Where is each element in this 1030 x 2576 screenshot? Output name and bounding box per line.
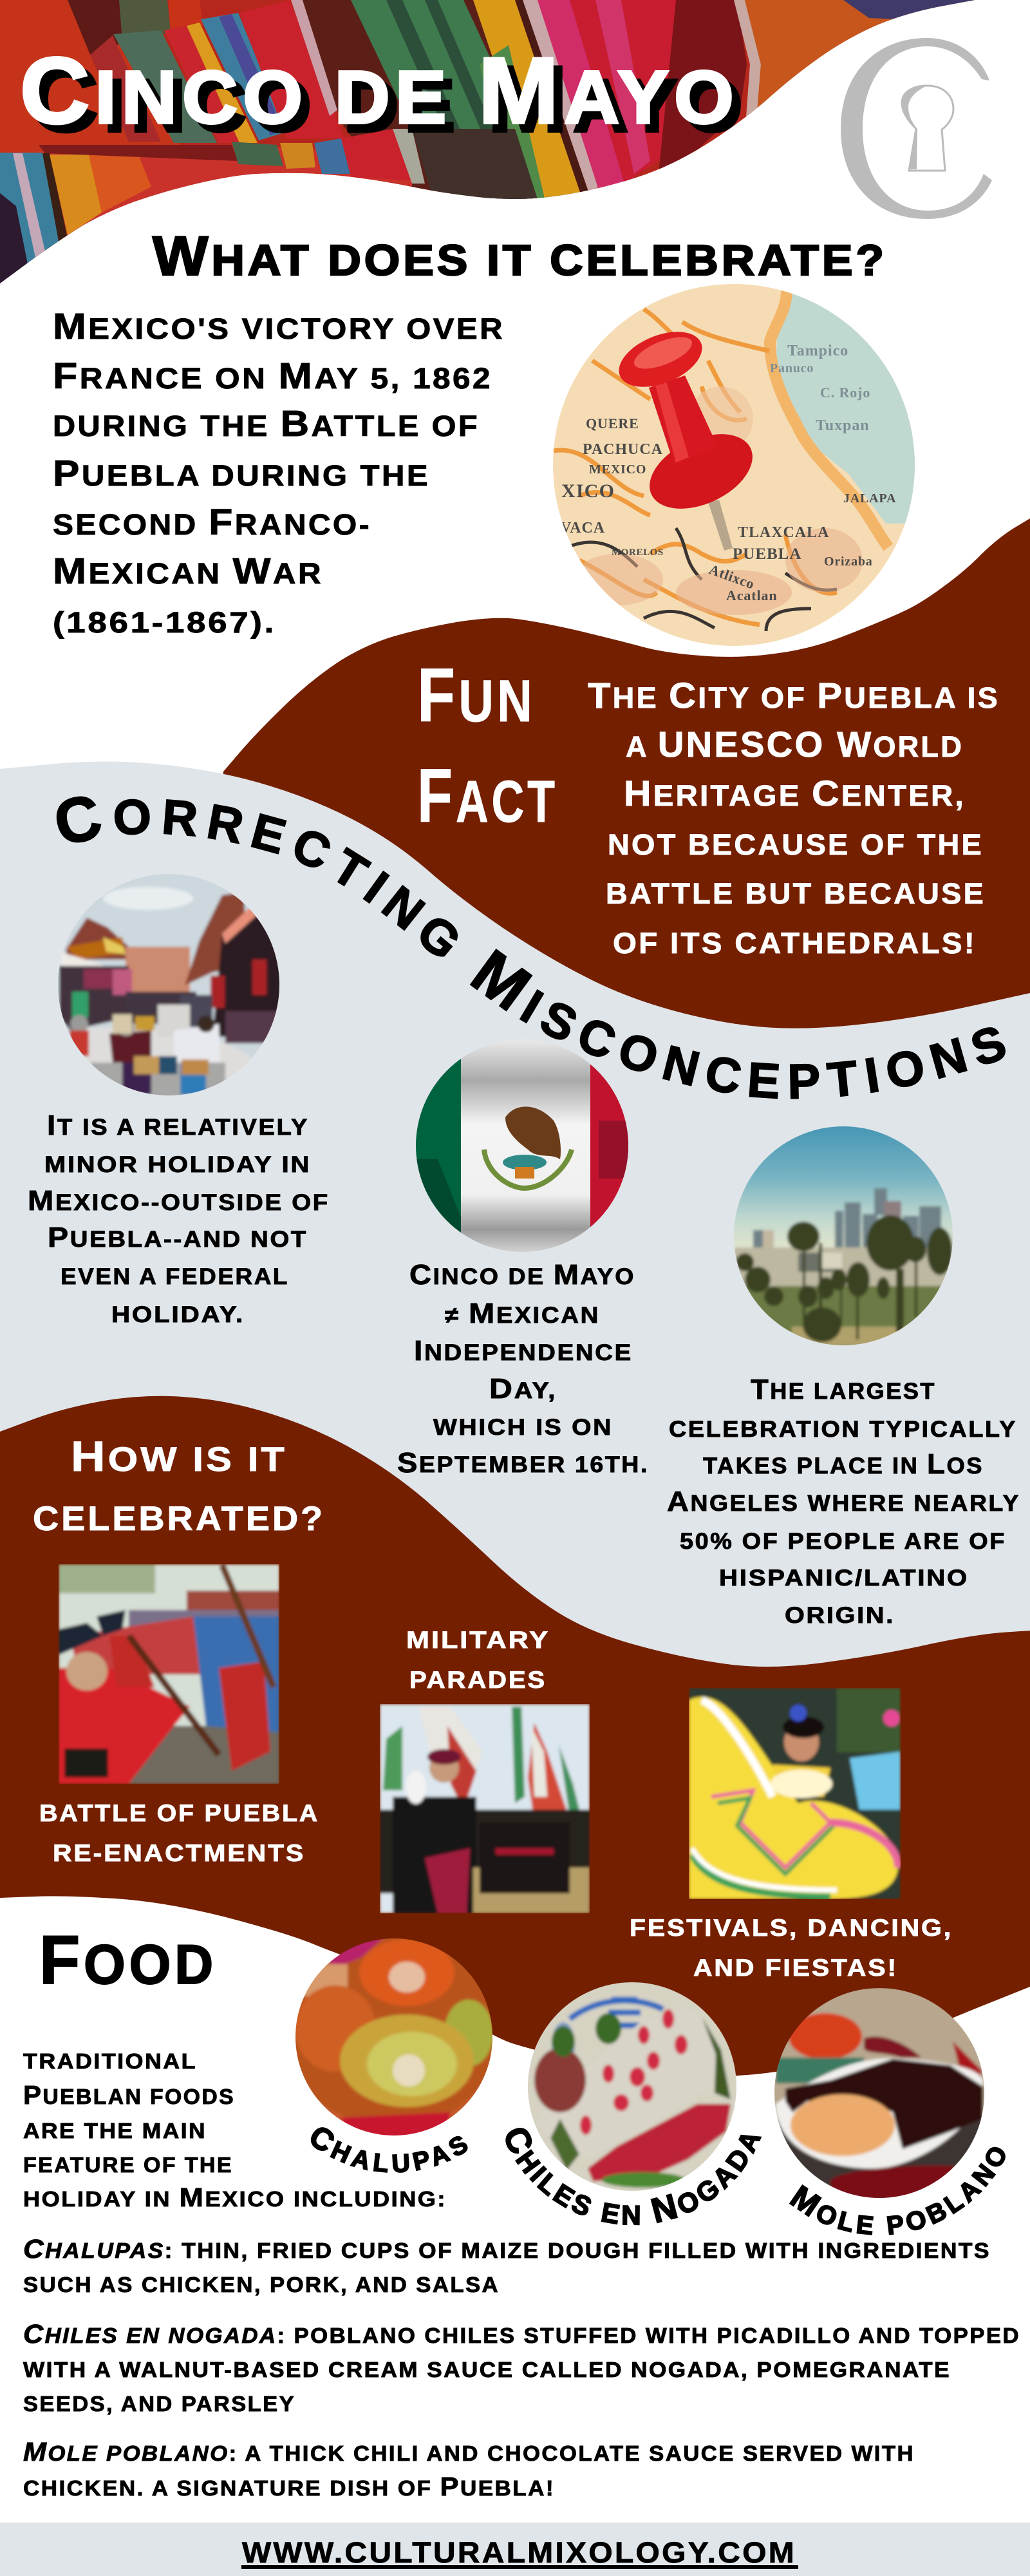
photo: chalupas [293,1935,496,2141]
text block: fun fact: BATTLE BUT BECAUSE [606,877,986,910]
text block: not independence day [397,1259,649,1479]
heading: fun fact: FACT [417,753,558,838]
text block: traditional foods intro: TRADITIONAL [23,2049,197,2073]
photo: mole poblano [772,1987,988,2202]
heading: fun fact [417,653,558,838]
text block: traditional foods intro [23,2049,447,2212]
text block: food descriptions [23,2234,1020,2501]
banner: woven serape textile [0,0,975,283]
text block: traditional foods intro: FEATURE OF THE [23,2153,233,2177]
heading: how is it celebrated: HOW IS IT [71,1432,287,1480]
photo: map with red pin: Tuxpan [816,417,870,434]
icon: red push pin [619,332,753,551]
text block: largest celebration [667,1374,1020,1628]
text block: fun fact: A UNESCO WORLD [626,724,964,764]
photo: battle re-enactment [59,1564,279,1784]
text block: minor holiday: EVEN A FEDERAL [61,1264,289,1289]
footer link: WWW.CULTURALMIXOLOGY.COM [242,2536,796,2569]
text block: fun fact: THE CITY OF PUEBLA IS [588,675,1000,715]
icon: national emblem [484,1106,572,1188]
photo: chiles en nogada [525,1980,740,2193]
text block: what it celebrates: MEXICO'S VICTORY OVER [53,306,505,347]
photo: Los Angeles skyline [734,1126,953,1345]
caption: military parades: MILITARY [406,1627,550,1653]
text block: fun fact: NOT BECAUSE OF THE [608,828,984,861]
panel: how is it celebrated wave [0,1396,1030,2076]
heading: fun fact: FUN [417,653,536,738]
text block: minor holiday: PUEBLA--AND NOT [48,1222,308,1253]
photo: map with red pin: MEXICO [589,462,646,477]
photo: map with red pin: PACHUCA [583,441,663,458]
text block: largest celebration: 50% OF PEOPLE ARE OF [680,1529,1006,1554]
photo: folkloric dancer [689,1688,901,1899]
text block: what it celebrates: (1861-1867). [53,606,276,639]
text block: not independence day: SEPTEMBER 16TH. [397,1447,649,1479]
text block: largest celebration: ORIGIN. [785,1603,895,1628]
panel: fun fact wave [193,518,1030,1095]
photo: Puebla market [58,874,279,1095]
caption: battle re-enactments: BATTLE OF PUEBLA [39,1800,319,1826]
caption: festivals [630,1915,953,1981]
text block: minor holiday: IT IS A RELATIVELY [47,1110,309,1141]
text block: what it celebrates: FRANCE ON MAY 5, 1862 [53,355,492,397]
footer bar [0,2523,1030,2576]
text block: food descriptions: SUCH AS CHICKEN, PORK, AND SALSA [23,2273,500,2297]
caption: battle re-enactments [39,1800,319,1866]
heading: correcting misconceptions (curved): CORRECTING MISCONCEPTIONS [57,796,1006,1099]
text block: not independence day: CINCO DE MAYO [409,1259,635,1291]
heading: how is it celebrated: CELEBRATED? [33,1500,325,1538]
text block: largest celebration: CELEBRATION TYPICALLY [669,1417,1017,1442]
text block: minor holiday: HOLIDAY. [111,1302,245,1327]
curved label: chiles en nogada: CHILES EN NOGADA [505,2128,762,2226]
text block: fun fact [588,675,1000,960]
text block: traditional foods intro: HOLIDAY IN MEXICO INCLUDING: [23,2183,447,2212]
text block: food descriptions: CHICKEN. A SIGNATURE DISH OF PUEBLA! [23,2472,555,2501]
title: CINCO DE MAYO [20,38,739,143]
photo: map with red pin: JALAPA [843,491,896,506]
photo: map with red pin: MORELOS [612,547,664,558]
text block: largest celebration: ANGELES WHERE NEARLY [667,1486,1020,1517]
text block: not independence day: ≠ MEXICAN [445,1298,600,1329]
heading: food: FOOD [39,1921,217,1998]
text block: not independence day: WHICH IS ON [433,1415,613,1440]
photo: map with red pin: Panuco [770,361,814,375]
photo: map with red pin: Tampico [787,343,848,359]
text block: minor holiday [28,1110,330,1327]
photo: map with red pin: Acatlan [726,587,778,603]
text block: traditional foods intro: PUEBLAN FOODS [23,2080,235,2110]
text block: largest celebration: THE LARGEST [751,1374,936,1405]
text block: traditional foods intro: ARE THE MAIN [23,2119,207,2143]
photo: map with red pin: TLAXCALA [738,524,829,541]
caption: festivals: AND FIESTAS! [693,1955,898,1981]
text block: fun fact: HERITAGE CENTER, [624,773,966,813]
photo: Mexican flag [412,1037,634,1256]
photo: map with red pin: VACA [560,520,605,536]
text block: food descriptions: SEEDS, AND PARSLEY [23,2392,295,2416]
text block: food descriptions: MOLE POBLANO : A THICK CHILI AND CHOCOLATE SAUCE SERVED WITH [23,2437,915,2467]
text block: largest celebration: TAKES PLACE IN LOS [703,1448,984,1480]
text block: minor holiday: MINOR HOLIDAY IN [44,1152,311,1177]
photo: map with red pin: Atlixco [707,561,757,592]
photo: map with red pin: C. Rojo [820,384,870,401]
photo: military parade [380,1704,590,1913]
photo: map with red pin: PUEBLA [733,545,801,563]
text block: minor holiday: MEXICO--OUTSIDE OF [28,1185,330,1217]
text block: food descriptions: WITH A WALNUT-BASED CREAM SAUCE CALLED NOGADA, POMEGRANATE [23,2358,951,2382]
text block: not independence day: DAY, [489,1373,557,1405]
text block: food descriptions: CHALUPAS : THIN, FRIED CUPS OF MAIZE DOUGH FILLED WITH INGREDIENTS [23,2234,991,2264]
text block: food descriptions: CHILES EN NOGADA : POBLANO CHILES STUFFED WITH PICADILLO AND TOPPED [23,2319,1020,2349]
text block: not independence day: INDEPENDENCE [414,1335,633,1367]
photo: map with red pin [550,282,921,649]
text block: what it celebrates: MEXICAN WAR [53,551,323,592]
text block: what it celebrates: DURING THE BATTLE OF [53,403,480,444]
photo: map with red pin: QUERE [586,415,639,431]
panel: gray misconceptions area [0,761,1030,1674]
photo: map with red pin: Orizaba [824,554,873,569]
text block: what it celebrates: SECOND FRANCO- [53,502,371,543]
logo: C with keyhole [841,38,992,219]
text block: fun fact: OF ITS CATHEDRALS! [613,927,977,960]
caption: festivals: FESTIVALS, DANCING, [630,1915,953,1941]
caption: battle re-enactments: RE-ENACTMENTS [53,1840,305,1866]
curved label: mole poblano: MOLE POBLANO [789,2147,1006,2235]
caption: military parades [406,1627,550,1693]
text block: largest celebration: HISPANIC/LATINO [719,1566,969,1591]
text block: what it celebrates: PUEBLA DURING THE [53,453,430,494]
heading: how is it celebrated [33,1432,325,1538]
heading: what does it celebrate: WHAT DOES IT CELEBRATE? [153,225,887,287]
text block: what it celebrates [53,306,505,639]
caption: military parades: PARADES [409,1667,547,1693]
photo: map with red pin: XICO [561,480,615,502]
curved label: chalupas: CHALUPAS [310,2127,468,2173]
